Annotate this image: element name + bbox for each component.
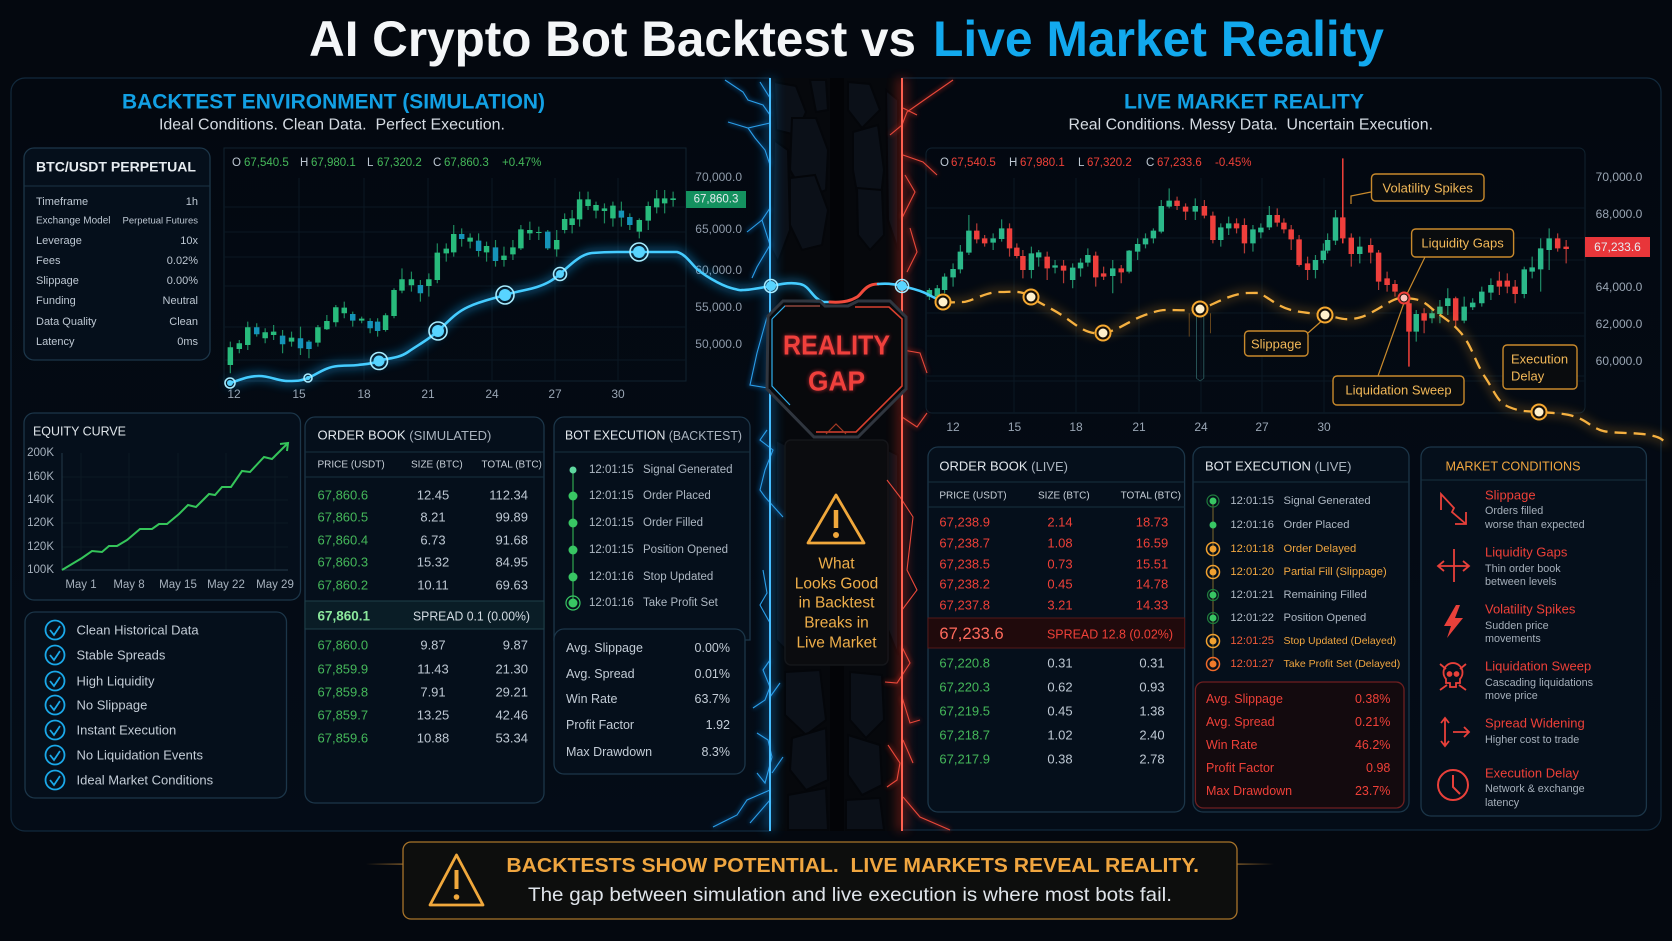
panel: BTC/USDT perpetual settings: Leverage (36, 235, 82, 247)
panel: bot execution backtest: 12:01:15 (589, 464, 634, 476)
live statistics (1195, 682, 1404, 808)
panel: bot execution backtest: 12:01:16 (589, 597, 634, 609)
panel: order book simulated: 67,859.6 (318, 730, 368, 746)
live statistics: Avg. Slippage (1206, 692, 1283, 706)
panel: order book simulated: 84.95 (495, 554, 528, 570)
live statistics: 46.2% (1355, 738, 1390, 752)
time axis: backtest: 30 (611, 387, 625, 401)
orange nodes (936, 290, 1546, 420)
panel: BTC/USDT perpetual settings: Perpetual Futures (122, 216, 198, 226)
live statistics: Max Drawdown (1206, 784, 1292, 798)
panel: order book live: 67,238.7 (939, 536, 990, 550)
panel: bot execution live: 12:01:18 (1230, 543, 1274, 555)
time axis: live: 27 (1255, 420, 1269, 434)
panel: order book live: 1.02 (1047, 728, 1073, 742)
panel: order book simulated: 42.46 (495, 708, 528, 722)
panel: order book live: PRICE (USDT) (939, 490, 1007, 502)
panel: bot execution live: 12:01:21 (1230, 589, 1274, 601)
panel: order book live: 0.45 (1047, 576, 1073, 592)
panel: order book live: 0.31 (1139, 656, 1165, 670)
panel: bot execution backtest: Position Opened (643, 544, 728, 556)
panel: equity curve: May 8 (113, 579, 145, 591)
panel: order book simulated: 67,860.6 (318, 488, 368, 502)
time axis: live: 21 (1132, 420, 1146, 434)
OHLC readout: backtest: H (300, 157, 308, 169)
panel: order book live: 67,237.8 (939, 598, 990, 612)
live statistics: 0.21% (1355, 715, 1390, 729)
time axis: live: 12 (946, 420, 960, 434)
panel: backtest statistics (554, 629, 745, 774)
icon: clock (1438, 770, 1468, 800)
stone tablet behind warning (785, 440, 888, 665)
price tag: live: 67,233.6 (1594, 240, 1641, 254)
panel: order book live: 14.33 (1136, 598, 1168, 612)
arrow head (280, 443, 288, 451)
badge: reality gap: GAP (808, 366, 865, 396)
badge: reality gap: REALITY (783, 330, 890, 360)
panel: order book simulated: 67,860.3 (318, 554, 368, 570)
center gap stone background (770, 78, 902, 831)
panel: equity curve: 140K (27, 494, 54, 506)
icon: slippage (1441, 494, 1466, 524)
panel: BTC/USDT perpetual settings: Neutral (163, 295, 198, 307)
OHLC readout: live: -0.45% (1215, 157, 1251, 169)
panel: equity curve: 160K (27, 471, 54, 483)
panel: bot execution backtest: Signal Generated (643, 464, 733, 476)
panel: order book live: 1.38 (1139, 704, 1165, 718)
panel: ideal conditions checklist: High Liquidity (76, 674, 155, 688)
OHLC readout: live: 67,233.6 (1157, 157, 1202, 169)
time axis: live: 15 (1008, 420, 1021, 434)
panel: ideal conditions checklist: Ideal Market Conditions (76, 772, 214, 788)
panel: order book live: 0.62 (1047, 680, 1073, 694)
price tag: live (1585, 237, 1650, 257)
panel: order book live: 0.38 (1047, 752, 1073, 766)
price axis: backtest: 60,000.0 (695, 263, 742, 277)
panel: order book simulated: 67,860.2 (318, 578, 368, 592)
callout: volatility spikes: Volatility Spikes (1383, 180, 1473, 196)
panel: BTC/USDT perpetual settings (24, 148, 210, 360)
price axis: live (1596, 170, 1643, 368)
panel: order book simulated: 7.91 (420, 684, 446, 700)
time axis: backtest: 21 (421, 387, 435, 401)
price axis: backtest (695, 170, 742, 351)
center divider: red lightning (885, 78, 953, 831)
panel: order book simulated: 10.88 (417, 730, 449, 746)
panel: order book live: 0.31 (1047, 656, 1073, 670)
OHLC readout: live: 67,980.1 (1020, 157, 1065, 169)
spread row: simulated (305, 601, 544, 629)
panel: equity curve: May 29 (256, 579, 294, 591)
price axis: live: 70,000.0 (1596, 170, 1643, 184)
OHLC readout: backtest: 67,320.2 (377, 157, 422, 169)
price axis: live: 64,000.0 (1596, 280, 1643, 294)
panel: market conditions: Orders filled (1485, 505, 1543, 517)
panel: bot execution live: 12:01:22 (1230, 612, 1274, 624)
panel: equity curve: May 15 (159, 579, 197, 591)
panel: order book simulated: 12.45 (417, 488, 449, 502)
panel: backtest statistics: Win Rate (566, 692, 617, 706)
panel: bot execution live: BOT EXECUTION (LIVE) (1205, 458, 1351, 474)
panel: order book live: 67,238.5 (939, 556, 990, 572)
icon: skull (1440, 663, 1466, 690)
spread row: live: SPREAD 12.8 (0.02%) (1047, 626, 1173, 642)
timeline: backtest (566, 466, 580, 610)
title: Live Market Reality (933, 11, 1384, 67)
panel: backtest statistics: 0.01% (695, 667, 730, 681)
panel: market conditions: Sudden price (1485, 620, 1549, 632)
chart: live candlesticks (926, 148, 1650, 434)
panel: BTC/USDT perpetual settings: Fees (36, 255, 61, 267)
icon: volatility bolt (1444, 605, 1463, 638)
panel: BTC/USDT perpetual settings: Exchange Model (36, 216, 110, 226)
OHLC readout: backtest: O (232, 157, 241, 169)
panel: order book simulated: 13.25 (417, 708, 449, 722)
title (309, 11, 1384, 67)
OHLC readout: backtest: C (433, 157, 441, 169)
spread row: live (928, 618, 1185, 648)
callout: what looks good breaks: Looks Good (795, 576, 878, 592)
OHLC readout: backtest: 67,860.3 (444, 157, 489, 169)
panel: order book simulated: 9.87 (503, 638, 528, 652)
panel: order book live: 67,238.2 (939, 576, 990, 592)
heading: live: LIVE MARKET REALITY (1124, 90, 1364, 114)
panel: bot execution live: Signal Generated (1284, 495, 1371, 507)
panel: equity curve (24, 413, 300, 600)
panel: BTC/USDT perpetual settings: Latency (36, 336, 75, 348)
panel: BTC/USDT perpetual settings: Slippage (36, 275, 79, 287)
time axis: live: 30 (1317, 420, 1331, 434)
callout: what looks good breaks: What (818, 556, 855, 572)
callout: execution delay: Delay (1511, 368, 1545, 384)
panel: equity curve: 120K (27, 517, 54, 529)
panel: bot execution backtest: Order Placed (643, 490, 711, 502)
panel: market conditions: Slippage (1485, 488, 1536, 502)
callout: execution delay: Execution (1511, 352, 1568, 366)
panel: bot execution backtest: 12:01:15 (589, 490, 634, 502)
panel: ideal conditions checklist: Clean Historical Data (76, 622, 199, 638)
panel: backtest statistics: 1.92 (706, 718, 730, 732)
panel: live market reality (902, 78, 1661, 830)
panel: backtest environment (11, 78, 770, 831)
panel: market conditions: between levels (1485, 576, 1557, 588)
spread row: simulated: SPREAD 0.1 (0.00%) (413, 608, 530, 624)
panel: bot execution live: Stop Updated (Delayed) (1284, 635, 1396, 647)
panel: bot execution backtest: Order Filled (643, 517, 703, 529)
panel: order book simulated: ORDER BOOK (SIMULATED) (318, 428, 491, 442)
badge: reality gap: GAP (808, 366, 865, 396)
panel: order book simulated: 15.32 (417, 554, 449, 570)
panel: order book simulated: 67,859.8 (318, 684, 368, 700)
live statistics: Win Rate (1206, 738, 1257, 752)
panel: order book live: 3.21 (1047, 598, 1073, 612)
panel: market conditions: Spread Widening (1485, 716, 1585, 730)
panel: bot execution backtest (554, 417, 750, 640)
panel: order book simulated: TOTAL (BTC) (482, 460, 542, 470)
callout: what looks good breaks: Live Market (796, 634, 877, 652)
panel: backtest statistics: Max Drawdown (566, 745, 652, 759)
panel: order book live: 18.73 (1136, 514, 1168, 530)
panel: ideal conditions checklist: No Slippage (76, 698, 147, 712)
OHLC readout: live: H (1009, 157, 1017, 169)
chart: backtest candlesticks (224, 148, 746, 401)
panel: bot execution live: Take Profit Set (Delayed) (1284, 658, 1400, 670)
time axis: live (946, 420, 1331, 434)
time axis: live: 18 (1069, 420, 1083, 434)
panel: order book live: 1.08 (1047, 536, 1073, 550)
price axis: live: 62,000.0 (1596, 317, 1643, 331)
panel: order book simulated: 67,860.4 (318, 532, 368, 548)
panel: order book live: 67,220.8 (939, 656, 990, 670)
panel: order book live: 67,217.9 (939, 752, 990, 766)
live statistics: Profit Factor (1206, 761, 1274, 775)
panel: order book live: 67,219.5 (939, 704, 990, 718)
OHLC readout: live: 67,320.2 (1087, 157, 1132, 169)
OHLC readout: live (940, 157, 1251, 169)
panel: order book simulated: 6.73 (420, 532, 446, 548)
panel: market conditions: Higher cost to trade (1485, 734, 1579, 746)
panel: order book simulated: 9.87 (420, 638, 446, 652)
panel: BTC/USDT perpetual settings: 10x (180, 235, 198, 247)
panel: order book live (928, 447, 1185, 812)
panel: equity curve: May 1 (65, 579, 97, 591)
panel: equity curve: 200K (27, 447, 54, 459)
panel: order book simulated: 11.43 (417, 662, 449, 676)
spread row: simulated: 67,860.1 (318, 608, 371, 624)
OHLC readout: live: 67,540.5 (951, 157, 996, 169)
price line: orange live path (943, 292, 1667, 443)
panel: order book simulated: 112.34 (489, 488, 528, 502)
panel: equity curve: 120K (27, 541, 54, 553)
footer banner: BACKTESTS SHOW POTENTIAL. LIVE MARKETS REVEAL REALITY. (506, 855, 1199, 877)
OHLC readout: backtest: +0.47% (502, 157, 541, 169)
panel: order book live: ORDER BOOK (LIVE) (939, 458, 1068, 474)
OHLC readout: backtest: 67,540.5 (244, 157, 289, 169)
panel: bot execution backtest: BOT EXECUTION (BACKTEST) (565, 428, 742, 442)
panel: bot execution live (1193, 447, 1409, 812)
panel: order book live: 0.93 (1139, 680, 1165, 694)
panel: backtest statistics: 63.7% (695, 692, 730, 706)
price axis: backtest: 50,000.0 (695, 337, 742, 351)
panel: bot execution live: 12:01:15 (1230, 495, 1274, 507)
panel: backtest statistics: 0.00% (695, 641, 730, 655)
panel: order book live: 2.78 (1139, 752, 1165, 766)
panel: market conditions: Cascading liquidations (1485, 677, 1594, 689)
panel: ideal conditions checklist: No Liquidation Events (76, 748, 203, 762)
panel: order book live: 0.45 (1047, 704, 1073, 718)
panel: market conditions: movements (1485, 633, 1541, 645)
panel: bot execution backtest: 12:01:15 (589, 517, 634, 529)
callout: liquidity gaps (1412, 229, 1514, 257)
panel: market conditions: Liquidation Sweep (1485, 658, 1591, 674)
OHLC readout: backtest: 67,980.1 (311, 157, 356, 169)
price tag: backtest (686, 191, 746, 208)
panel: order book simulated (305, 417, 544, 803)
time axis: backtest: 27 (548, 387, 562, 401)
callout: what looks good breaks: in Backtest (799, 594, 875, 612)
panel: equity curve: EQUITY CURVE (33, 424, 126, 438)
icon: footer warning (430, 855, 483, 905)
panel: market conditions (1421, 447, 1646, 816)
panel: market conditions: Volatility Spikes (1485, 602, 1576, 616)
panel: BTC/USDT perpetual settings: 0ms (177, 336, 198, 348)
panel: bot execution live: Partial Fill (Slippage) (1284, 566, 1387, 578)
time axis: backtest (227, 387, 625, 401)
callout: slippage: Slippage (1251, 336, 1302, 352)
panel: BTC/USDT perpetual settings: Funding (36, 295, 76, 307)
time axis: live: 24 (1194, 420, 1208, 434)
panel: order book simulated: 67,860.5 (318, 510, 368, 524)
time axis: backtest: 15 (292, 387, 306, 401)
live chart callout leaders (1308, 192, 1425, 376)
panel: order book simulated: 8.21 (420, 510, 446, 524)
panel: market conditions: Thin order book (1485, 563, 1561, 575)
panel: market conditions: latency (1485, 797, 1520, 809)
panel: backtest statistics: Avg. Spread (566, 667, 635, 681)
panel: bot execution live: Order Placed (1284, 519, 1349, 531)
panel: order book live: 15.51 (1136, 556, 1168, 572)
callout: slippage (1245, 331, 1308, 356)
callout: liquidation sweep: Liquidation Sweep (1345, 382, 1452, 398)
badge: reality gap (767, 301, 906, 437)
panel: order book simulated: 21.30 (495, 662, 528, 676)
OHLC readout: live: L (1078, 157, 1085, 169)
panel: ideal conditions checklist (25, 612, 286, 798)
live statistics: 0.98 (1366, 761, 1390, 775)
panel: order book live: 67,238.9 (939, 514, 990, 530)
panel: order book live: 0.73 (1047, 556, 1073, 572)
price axis: backtest: 55,000.0 (695, 300, 742, 314)
icon: liquidity gaps (1438, 549, 1469, 582)
callout: volatility spikes (1372, 174, 1484, 201)
panel: market conditions: Liquidity Gaps (1485, 544, 1568, 560)
panel: market conditions: Network & exchange (1485, 783, 1585, 795)
callout: liquidity gaps: Liquidity Gaps (1421, 236, 1504, 250)
panel: equity curve: May 22 (207, 579, 245, 591)
time axis: backtest: 24 (485, 387, 499, 401)
icon: warning triangle (808, 495, 864, 543)
panel: bot execution live: 12:01:20 (1230, 566, 1274, 578)
blue nodes (225, 243, 908, 388)
callout: execution delay (1503, 345, 1577, 389)
price axis: backtest: 70,000.0 (695, 170, 742, 184)
panel: order book live: 14.78 (1136, 576, 1168, 592)
price line: blue backtest path (230, 252, 943, 383)
panel: order book live: TOTAL (BTC) (1121, 490, 1181, 502)
panel: equity curve: 100K (27, 564, 54, 576)
panel: order book live: 2.40 (1139, 728, 1165, 742)
panel: order book live: 16.59 (1136, 536, 1168, 550)
panel: BTC/USDT perpetual settings: 1h (186, 196, 198, 208)
panel: BTC/USDT perpetual settings: Clean (169, 316, 198, 328)
panel: bot execution backtest: Stop Updated (643, 571, 713, 583)
price axis: live: 68,000.0 (1596, 207, 1643, 221)
panel: backtest statistics: Avg. Slippage (566, 641, 643, 655)
panel: order book simulated: 29.21 (495, 684, 528, 700)
icon: spread widening (1441, 718, 1469, 746)
panel: bot execution backtest: 12:01:15 (589, 544, 634, 556)
panel: market conditions: MARKET CONDITIONS (1446, 458, 1581, 474)
panel: order book simulated: 69.63 (495, 578, 528, 592)
timeline: live (1206, 495, 1220, 670)
panel: order book simulated: 53.34 (495, 730, 528, 746)
callout: what looks good breaks (795, 495, 878, 652)
panel: market conditions: Execution Delay (1485, 766, 1579, 780)
equity line (62, 444, 287, 570)
panel: order book live: 67,220.3 (939, 680, 990, 694)
time axis: backtest: 12 (227, 387, 241, 401)
center divider: blue lightning (713, 78, 783, 831)
spread row: live: 67,233.6 (939, 625, 1004, 643)
price axis: live: 60,000.0 (1596, 354, 1643, 368)
panel: order book simulated: 10.11 (417, 578, 449, 592)
panel: order book live: 67,218.7 (939, 728, 990, 742)
panel: bot execution live: 12:01:16 (1230, 519, 1274, 531)
panel: BTC/USDT perpetual settings: 0.00% (167, 275, 198, 287)
panel: bot execution backtest: Take Profit Set (643, 597, 719, 609)
panel: ideal conditions checklist: Stable Spreads (76, 648, 166, 662)
panel: bot execution live: 12:01:27 (1230, 658, 1274, 670)
OHLC readout: backtest: L (367, 157, 374, 169)
callout: liquidation sweep (1333, 376, 1464, 405)
price tag: backtest: 67,860.3 (694, 194, 738, 206)
panel: BTC/USDT perpetual settings: 0.02% (167, 255, 198, 267)
panel: BTC/USDT perpetual settings: Timeframe (36, 196, 88, 208)
panel: market conditions: worse than expected (1484, 519, 1585, 531)
panel: market conditions: move price (1485, 690, 1538, 702)
panel: order book simulated: SIZE (BTC) (411, 460, 463, 470)
price axis: backtest: 65,000.0 (695, 222, 742, 236)
heading: backtest: BACKTEST ENVIRONMENT (SIMULATION) (122, 90, 545, 114)
panel: bot execution backtest: 12:01:16 (589, 571, 634, 583)
OHLC readout: live: O (940, 157, 949, 169)
panel: backtest statistics: 8.3% (702, 745, 730, 759)
panel: backtest statistics: Profit Factor (566, 718, 634, 732)
OHLC readout: backtest (232, 157, 541, 169)
subheading: backtest: Ideal Conditions. Clean Data. Perfect Execution. (159, 116, 505, 134)
live statistics: 0.38% (1355, 692, 1390, 706)
panel: bot execution live: Remaining Filled (1284, 589, 1367, 601)
callout: what looks good breaks: Breaks in (804, 614, 869, 632)
panel: bot execution live: Position Opened (1284, 612, 1366, 624)
panel: order book live: SIZE (BTC) (1038, 490, 1090, 502)
live statistics: Avg. Spread (1206, 715, 1275, 729)
panel: order book simulated: 67,859.9 (318, 662, 368, 676)
title: AI Crypto Bot Backtest vs (309, 11, 916, 67)
panel: order book live: 2.14 (1047, 514, 1073, 530)
panel: order book simulated: 67,859.7 (318, 708, 368, 722)
panel: order book simulated: 67,860.0 (318, 638, 368, 652)
OHLC readout: live: C (1146, 157, 1154, 169)
panel: order book simulated: 91.68 (495, 532, 528, 548)
badge: reality gap: REALITY (783, 330, 890, 360)
panel: bot execution live: Order Delayed (1284, 543, 1356, 555)
panel: BTC/USDT perpetual settings: BTC/USDT PERPETUAL (36, 160, 196, 174)
panel: BTC/USDT perpetual settings: Data Quality (36, 316, 97, 328)
panel: bot execution live: 12:01:25 (1230, 635, 1274, 647)
subheading: live: Real Conditions. Messy Data. Uncertain Execution. (1068, 116, 1433, 134)
live statistics: 23.7% (1355, 784, 1390, 798)
time axis: backtest: 18 (357, 387, 371, 401)
footer banner: The gap between simulation and live execution is where most bots fail. (528, 884, 1172, 906)
panel: ideal conditions checklist: Instant Execution (76, 722, 176, 738)
footer banner (366, 842, 1274, 919)
panel: order book simulated: 99.89 (495, 510, 528, 524)
panel: order book simulated: PRICE (USDT) (318, 460, 385, 470)
